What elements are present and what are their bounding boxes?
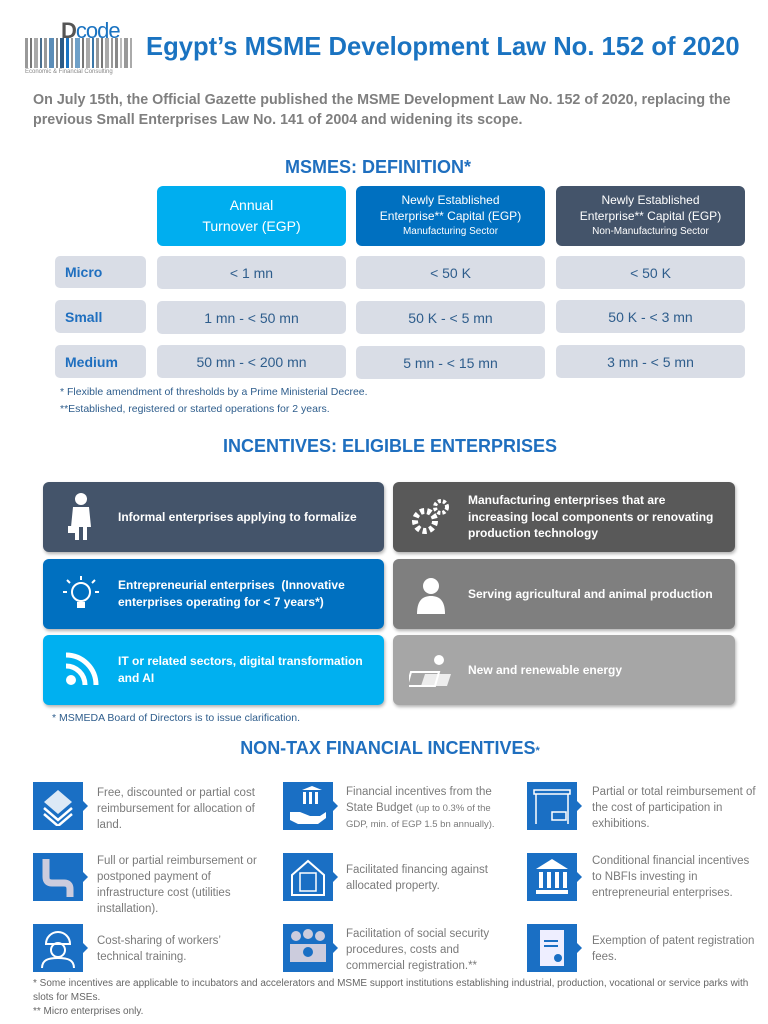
item: state budget: Financial incentives from the State Budget (up to 0.3% of the GDP, min. of EGP 1.5 bn annually). — [346, 786, 495, 830]
item: NBFIs: Conditional financial incentives to NBFIs investing in entrepreneurial enterprises. — [592, 855, 749, 899]
card: agriculture: Serving agricultural and animal production — [468, 587, 713, 601]
card: IT — [43, 635, 384, 705]
item: property — [283, 853, 488, 901]
card: energy — [393, 635, 735, 705]
item: patent — [527, 924, 754, 972]
logo — [25, 18, 132, 75]
item: state budget — [283, 782, 495, 830]
header: non-manufacturing — [556, 186, 745, 246]
item: training — [33, 924, 221, 972]
item: social security: Facilitation of social security procedures, costs and commercial registration.** — [346, 928, 489, 972]
table: definitions — [55, 186, 745, 379]
table: definitions: 50 K - < 3 mn — [608, 308, 693, 324]
item: training: Cost-sharing of workers’ technical training. — [97, 935, 221, 963]
header: non-manufacturing: Newly Established — [601, 193, 700, 207]
card: entrepreneurial — [43, 559, 384, 629]
card: entrepreneurial: Entrepreneurial enterprises (Innovative enterprises operating for < 7 years*) — [118, 578, 345, 609]
footnotes: definition — [60, 386, 368, 415]
table: definitions: < 1 mn — [230, 264, 273, 280]
item: exhibitions: Partial or total reimbursement of the cost of participation in exhibitions. — [592, 786, 756, 830]
table: definitions: 50 K - < 5 mn — [408, 310, 493, 326]
card: agriculture — [393, 559, 735, 629]
header: manufacturing: Newly Established — [401, 193, 500, 207]
heading: eligible: INCENTIVES: ELIGIBLE ENTERPRISES — [223, 436, 557, 456]
header: turnover: Turnover (EGP) — [202, 218, 301, 234]
footnotes: non-tax: * Some incentives are applicable to incubators and accelerators and MSME support institutions establishing industrial, production, vocational or service parks with slots for MSEs. — [33, 978, 748, 1003]
card: manufacturing: Manufacturing enterprises that are increasing local components or renovating production technology — [468, 493, 713, 540]
footnotes: non-tax — [33, 978, 748, 1017]
card: informal — [43, 482, 384, 552]
heading: definition: MSMES: DEFINITION* — [285, 157, 471, 177]
footnotes: non-tax: ** Micro enterprises only. — [33, 1006, 143, 1017]
footnote: eligible: * MSMEDA Board of Directors is to issue clarification. — [52, 712, 300, 724]
item: infrastructure — [33, 853, 257, 915]
intro text: On July 15th, the Official Gazette published the MSME Development Law No. 152 of 2020, replacing the previous Small Enterprises Law No. 141 of 2004 and widening its scope. — [33, 92, 731, 128]
item: NBFIs — [527, 853, 749, 901]
item: property: Facilitated financing against allocated property. — [346, 864, 488, 892]
table: definitions: 1 mn - < 50 mn — [204, 310, 299, 326]
footnotes: definition: **Established, registered or started operations for 2 years. — [60, 403, 330, 415]
header: manufacturing: Enterprise** Capital (EGP) — [380, 209, 521, 223]
table: definitions: 50 mn - < 200 mn — [196, 354, 307, 370]
table: definitions: 5 mn - < 15 mn — [403, 354, 498, 370]
title: Egypt’s MSME Development Law No. 152 of 2020 — [146, 33, 740, 61]
header: turnover — [157, 186, 346, 246]
footnotes: definition: * Flexible amendment of thresholds by a Prime Ministerial Decree. — [60, 386, 368, 398]
card: energy: New and renewable energy — [468, 663, 622, 677]
logo: Economic & Financial Consulting — [25, 69, 113, 75]
table: definitions: 3 mn - < 5 mn — [607, 354, 694, 370]
logo: Dcode — [61, 18, 120, 43]
header: turnover: Annual — [230, 197, 273, 213]
item: social security — [283, 924, 489, 972]
table: definitions: < 50 K — [430, 264, 471, 280]
header: non-manufacturing: Non-Manufacturing Sector — [592, 226, 709, 237]
item: exhibitions — [527, 782, 756, 830]
item: land: Free, discounted or partial cost reimbursement for allocation of land. — [97, 787, 255, 831]
card: informal: Informal enterprises applying to formalize — [118, 510, 357, 524]
incentive grid — [33, 782, 756, 972]
table: definitions: Medium — [65, 354, 118, 370]
table: definitions: < 50 K — [630, 264, 671, 280]
header: manufacturing: Manufacturing Sector — [403, 226, 498, 237]
item: infrastructure: Full or partial reimbursement or postponed payment of infrastructure cost (utilities installation). — [97, 855, 257, 915]
card: manufacturing — [393, 482, 735, 552]
card: IT: IT or related sectors, digital transformation and AI — [118, 654, 363, 685]
heading: non-tax: NON-TAX FINANCIAL INCENTIVES* — [240, 738, 540, 758]
header: non-manufacturing: Enterprise** Capital (EGP) — [580, 209, 721, 223]
item: patent: Exemption of patent registration fees. — [592, 935, 754, 963]
header: manufacturing — [356, 186, 545, 246]
table: definitions: Small — [65, 308, 102, 324]
table: definitions: Micro — [65, 264, 102, 280]
item: land — [33, 782, 255, 831]
